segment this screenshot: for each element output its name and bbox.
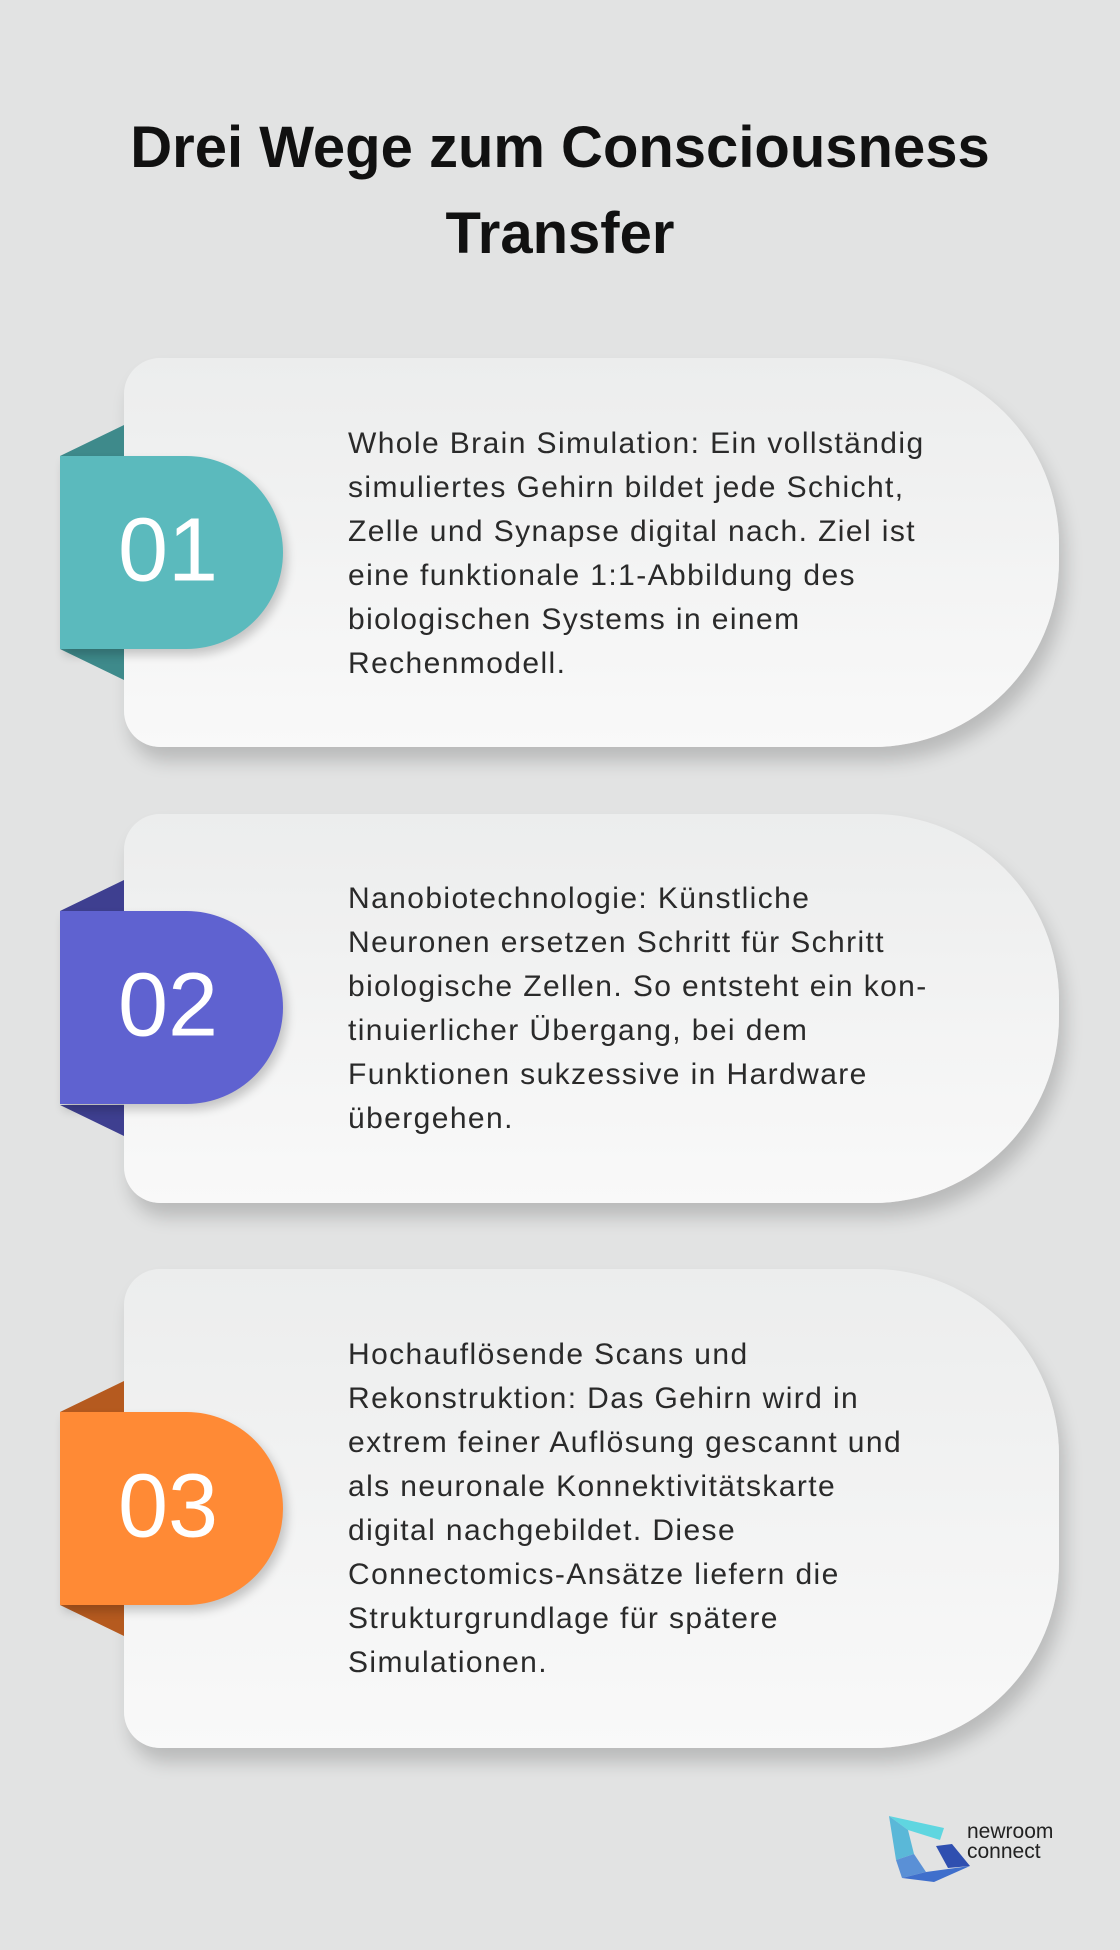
tab: 01: 01 — [118, 500, 218, 600]
logo text: newroom — [967, 1820, 1053, 1843]
tab: 03 — [60, 1412, 283, 1605]
logo text: connect — [967, 1840, 1041, 1863]
text: card 3: digital nachgebildet. Diese — [348, 1514, 736, 1547]
panel: card 2 — [124, 814, 1059, 1203]
text: card 1: Whole Brain Simulation: Ein vollständig — [348, 427, 925, 460]
title — [130, 115, 990, 266]
fold top 2 — [60, 880, 124, 911]
text: card 2: Funktionen sukzessive in Hardware — [348, 1058, 868, 1091]
panel: card 1 — [124, 358, 1059, 747]
logo — [889, 1816, 1053, 1882]
fold top 1 — [60, 425, 124, 456]
logo text — [967, 1820, 1053, 1863]
text: card 3: Rekonstruktion: Das Gehirn wird in — [348, 1382, 859, 1415]
text: card 3 — [348, 1338, 902, 1679]
title: Drei Wege zum Consciousness — [130, 115, 990, 180]
icon: logo mark — [889, 1816, 970, 1882]
text: card 2: übergehen. — [348, 1102, 514, 1135]
text: card 1: Rechenmodell. — [348, 647, 566, 680]
tab: 02: 02 — [118, 955, 218, 1055]
tab: 02 — [60, 911, 283, 1104]
text: card 1: eine funktionale 1:1-Abbildung des — [348, 559, 856, 592]
tab: 01 — [60, 456, 283, 649]
fold bottom 1 — [60, 649, 124, 680]
text: card 2: biologische Zellen. So entsteht ein kon- — [348, 970, 928, 1003]
text: card 3: extrem feiner Auflösung gescannt und — [348, 1426, 902, 1459]
text: card 3: Simulationen. — [348, 1646, 548, 1679]
tab: 03: 03 — [118, 1456, 218, 1556]
text: card 1: biologischen Systems in einem — [348, 603, 800, 636]
text: card 2: tinuierlicher Übergang, bei dem — [348, 1014, 808, 1047]
text: card 2: Neuronen ersetzen Schritt für Schritt — [348, 926, 885, 959]
text: card 2: Nanobiotechnologie: Künstliche — [348, 882, 810, 915]
text: card 1: Zelle und Synapse digital nach. Ziel ist — [348, 515, 916, 548]
fold top 3 — [60, 1381, 124, 1412]
text: card 3: als neuronale Konnektivitätskarte — [348, 1470, 836, 1503]
text: card 1 — [348, 427, 925, 680]
text: card 3: Strukturgrundlage für spätere — [348, 1602, 779, 1635]
fold bottom 3 — [60, 1605, 124, 1636]
text: card 1: simuliertes Gehirn bildet jede Schicht, — [348, 471, 904, 504]
title: Transfer — [446, 201, 674, 266]
text: card 3: Hochauflösende Scans und — [348, 1338, 749, 1371]
text: card 2 — [348, 882, 928, 1135]
panel: card 3 — [124, 1269, 1059, 1748]
text: card 3: Connectomics-Ansätze liefern die — [348, 1558, 840, 1591]
fold bottom 2 — [60, 1105, 124, 1136]
